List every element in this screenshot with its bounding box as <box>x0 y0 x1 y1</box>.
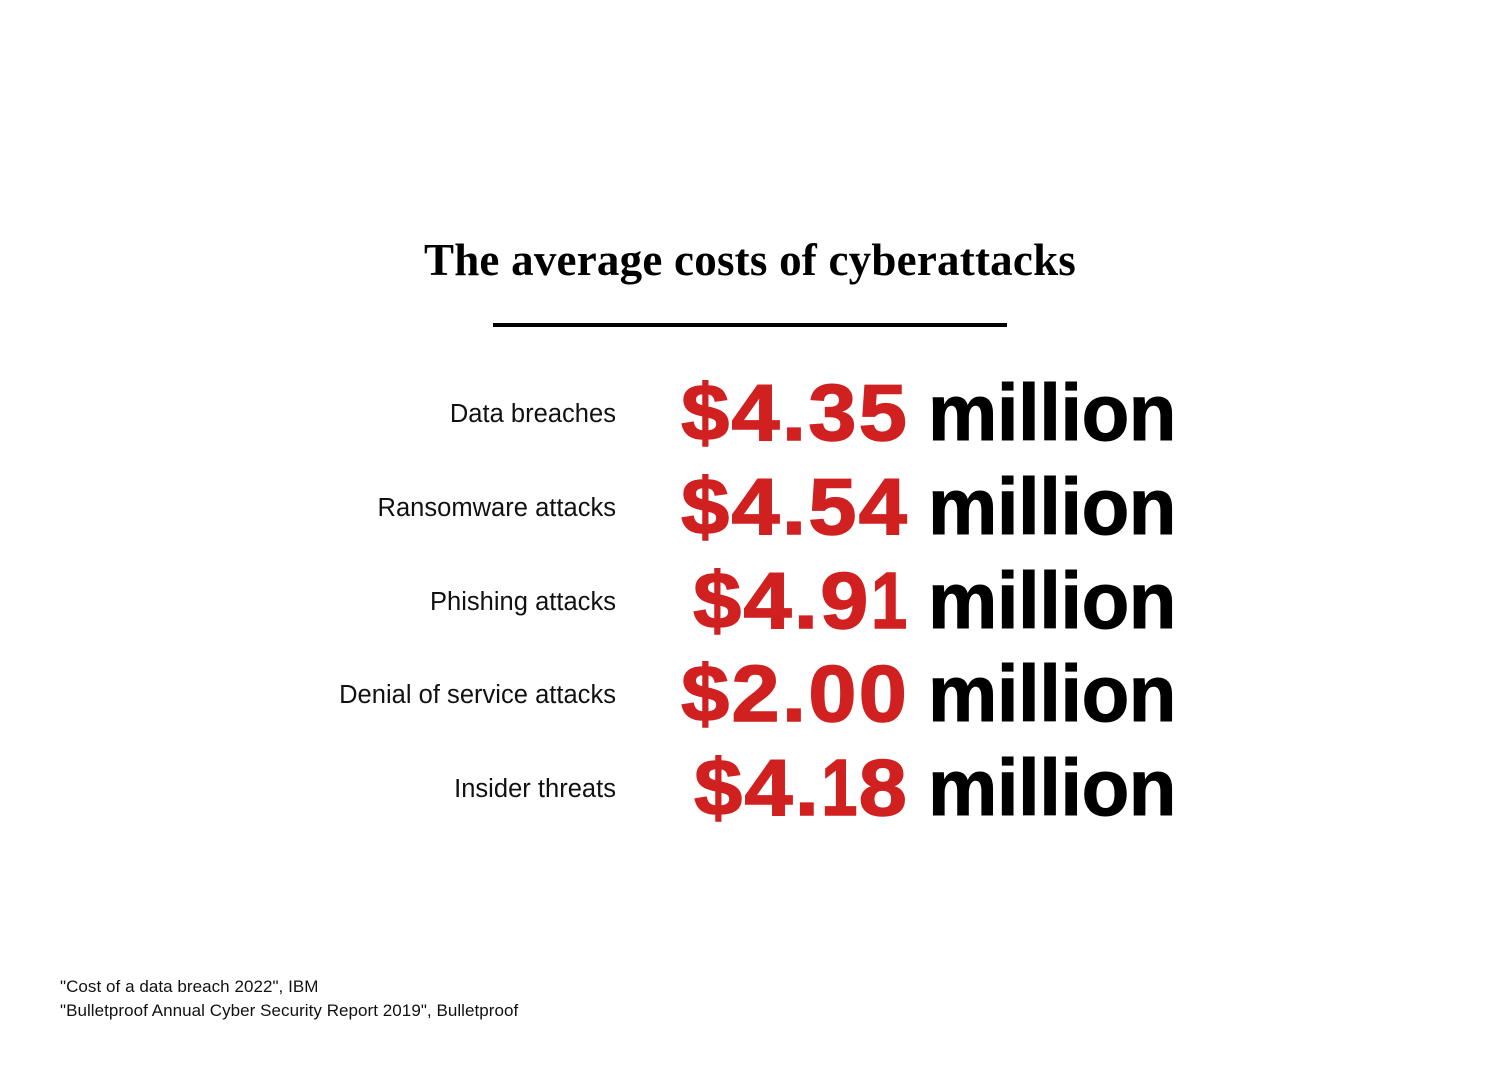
label: phishing attacks: Phishing attacks <box>430 588 616 616</box>
unit: million: million <box>928 368 1176 457</box>
value: 4.18: 1 <box>821 743 859 832</box>
row: insider threats <box>454 743 1176 832</box>
value: 4.54: $4.54 <box>681 462 909 551</box>
sources <box>60 977 518 1020</box>
row: phishing attacks <box>430 556 1176 645</box>
unit: million: million <box>928 649 1176 738</box>
label: insider threats: Insider threats <box>454 775 616 803</box>
value: 2.00: $2.00 <box>681 649 909 738</box>
row: ransomware attacks <box>378 462 1176 551</box>
title: The average costs of cyberattacks <box>424 235 1076 285</box>
value: 4.91: 1 <box>870 556 908 645</box>
value: 4.35: $4.35 <box>681 368 909 457</box>
sources: "Bulletproof Annual Cyber Security Report 2019", Bulletproof <box>60 1001 518 1020</box>
row: denial of service attacks <box>339 649 1176 738</box>
unit: million: million <box>928 462 1176 551</box>
value: 4.91: $4.9 <box>693 556 871 645</box>
label: ransomware attacks: Ransomware attacks <box>378 494 616 522</box>
unit: million: million <box>928 556 1176 645</box>
label: data breaches: Data breaches <box>450 400 616 428</box>
unit: million: million <box>928 743 1176 832</box>
title underline <box>493 323 1007 327</box>
row: data breaches <box>450 368 1176 457</box>
label: denial of service attacks: Denial of service attacks <box>339 681 616 709</box>
sources: "Cost of a data breach 2022", IBM <box>60 977 318 996</box>
value: 4.18: $4. 8 <box>694 743 909 832</box>
